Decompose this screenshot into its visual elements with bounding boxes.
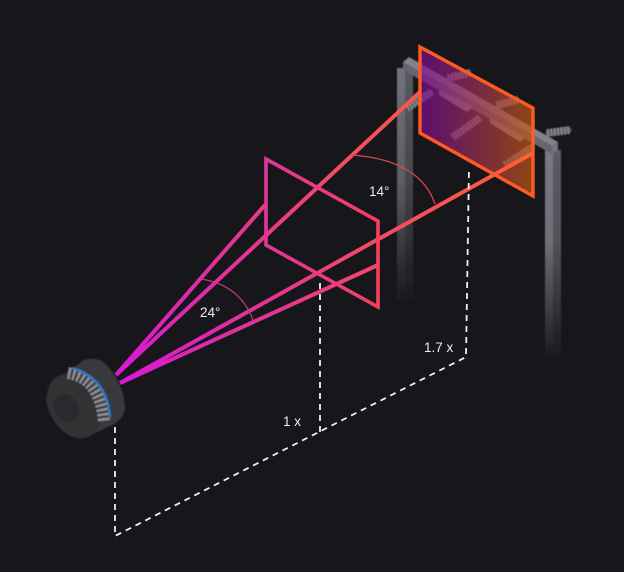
camera lens <box>48 389 84 427</box>
top beam <box>403 57 558 154</box>
mounting brackets <box>439 90 525 142</box>
grille ring <box>68 373 104 421</box>
label: 1 x: 1 x <box>283 414 301 429</box>
dashed distance guides <box>115 167 469 536</box>
icon: camera <box>36 359 125 448</box>
label: 14 degrees: 14° <box>369 184 389 199</box>
blue ring <box>72 368 110 417</box>
screws <box>407 73 570 165</box>
rays from camera <box>116 92 533 383</box>
far target plane, filled <box>420 47 533 196</box>
middle target plane outline <box>266 159 378 307</box>
camera rear body <box>46 359 125 438</box>
label: 1.7 x: 1.7 x <box>424 340 454 355</box>
right post <box>545 150 561 362</box>
angle arc: 14 degrees <box>352 155 435 204</box>
camera front face <box>36 364 112 448</box>
label: 24 degrees: 24° <box>200 305 220 320</box>
mounting frame: posts, beam, screws <box>397 57 570 362</box>
angle arc: 24 degrees <box>201 279 253 320</box>
left post <box>397 68 413 305</box>
